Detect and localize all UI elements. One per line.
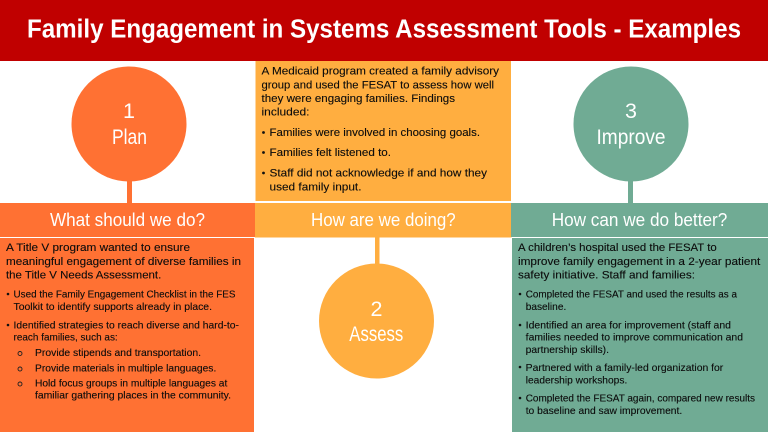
title banner: Family Engagement in Systems Assessment Tools - Examples [27,16,741,44]
circle: 1 Plan: 1 [123,99,135,123]
panel: improve example: Completed the FESAT and used the results as a [526,290,737,301]
panel: improve example [512,238,768,432]
panel: improve example: Identified an area for improvement (staff and [526,321,731,332]
panel: assess example: Families felt listened to. [270,147,391,159]
panel: plan example [0,238,254,432]
panel: plan example: reach families, such as: [14,333,118,344]
heading: How are we doing? [255,203,512,238]
panel: improve example: families needed to improve communication and [526,333,743,344]
panel: plan example: Used the Family Engagement Checklist in the FES [14,290,236,301]
panel: plan example: A Title V program wanted to ensure [6,242,190,254]
panel: improve example: leadership workshops. [526,375,627,386]
panel: improve example: Completed the FESAT again, compared new results [526,394,755,405]
panel: assess example: used family input. [270,181,362,193]
panel: assess example [256,61,511,201]
panel: assess example: Staff did not acknowledge if and how they [270,168,487,180]
panel: improve example: improve family engagement in a 2-year patient [518,256,761,268]
panel: improve example: partnership skills). [526,345,609,356]
panel: plan example: Provide stipends and transportation. [35,348,201,359]
heading: How can we do better? [511,203,768,237]
panel: improve example: A children’s hospital used the FESAT to [518,242,717,254]
panel: plan example: Identified strategies to reach diverse and hard-to- [14,321,239,332]
panel: plan example: meaningful engagement of diverse families in [6,256,241,268]
panel: improve example: Partnered with a family-led organization for [526,363,724,374]
circle: 1 Plan [72,66,186,204]
circle: 3 Improve: Improve [596,125,666,149]
panel: assess example: they were engaging families. Findings [262,93,455,105]
panel: assess example: Families were involved in choosing goals. [270,127,480,139]
circle: 3 Improve: 3 [625,99,637,123]
heading: How are we doing?: How are we doing? [311,210,456,230]
panel: assess example: included: [262,107,310,119]
panel: assess example: group and used the FESAT to assess how well [262,80,494,92]
panel: improve example: safety initiative. Staff and families: [518,270,695,282]
panel: assess example: A Medicaid program created a family advisory [262,66,499,78]
circle: 3 Improve [574,66,688,204]
circle: 2 Assess: Assess [349,322,403,346]
heading: What should we do? [0,203,255,237]
panel: plan example: Hold focus groups in multiple languages at [35,378,227,389]
circle: 2 Assess [319,237,434,378]
panel: plan example: the Title V Needs Assessment. [6,270,161,282]
circle: 1 Plan: Plan [112,125,147,149]
panel: improve example: baseline. [526,302,566,313]
panel: improve example: to baseline and saw improvement. [526,406,682,417]
title banner [0,0,768,61]
heading: What should we do?: What should we do? [50,210,205,230]
heading: How can we do better?: How can we do better? [552,210,727,230]
circle: 2 Assess: 2 [371,297,382,321]
panel: plan example: Provide materials in multiple languages. [35,363,216,374]
panel: plan example: familiar gathering places in the community. [35,391,231,402]
panel: plan example: Toolkit to identify supports already in place. [14,302,212,313]
